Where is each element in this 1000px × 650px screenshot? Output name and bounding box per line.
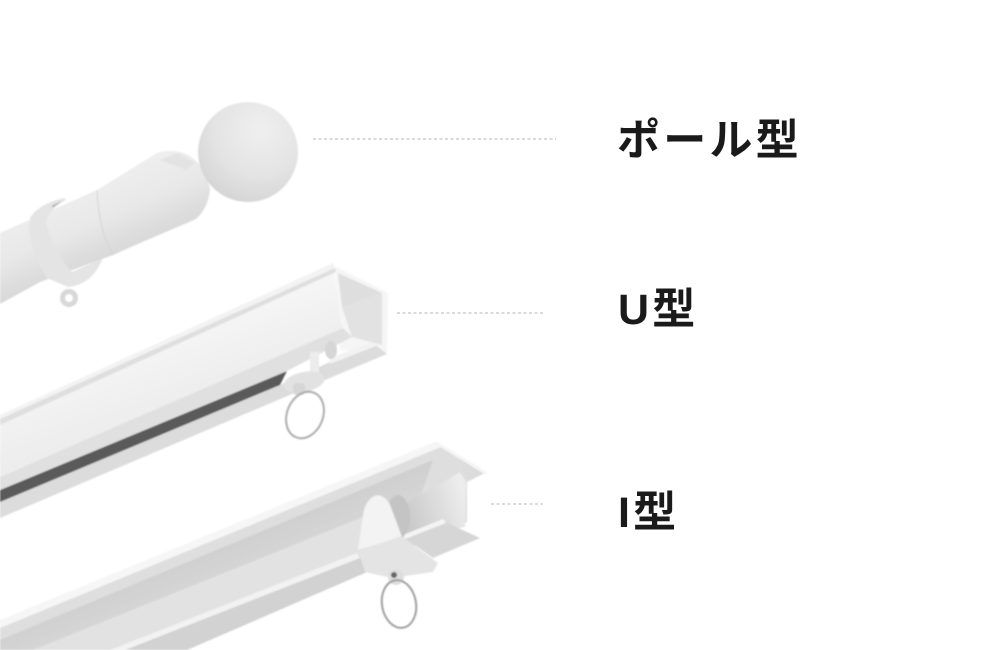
icon: pole type curtain rail (0, 102, 298, 304)
pole ring (29, 198, 103, 287)
icon: U type curtain rail (0, 263, 388, 518)
U rail slot (0, 371, 287, 502)
I rail roller carrier (358, 495, 438, 631)
pole ball finial (198, 102, 298, 202)
leader line: I type (491, 503, 543, 505)
I rail web end (403, 472, 466, 537)
U rail lower lip (0, 343, 387, 518)
I rail top end flange (437, 442, 487, 482)
U rail runner hook (279, 341, 337, 444)
I rail lower flange (125, 556, 367, 650)
I rail body (0, 442, 467, 650)
U rail top ledge (0, 263, 336, 424)
I rail lower end flange (403, 521, 480, 558)
I rail web shading (0, 460, 433, 650)
I rail top highlight (0, 441, 441, 628)
leader line: U type (397, 312, 545, 314)
I rail light web band (33, 517, 363, 650)
label: U type: U型 (618, 286, 698, 334)
label: pole type: ポール型 (617, 117, 802, 165)
U rail inner channel (335, 266, 388, 355)
U rail front face (0, 270, 343, 477)
U rail lip under face (0, 328, 352, 490)
icon: I type curtain rail (0, 441, 487, 650)
label: I type: I型 (618, 489, 679, 537)
pole rod (0, 151, 210, 304)
leader line: pole type (313, 138, 556, 140)
